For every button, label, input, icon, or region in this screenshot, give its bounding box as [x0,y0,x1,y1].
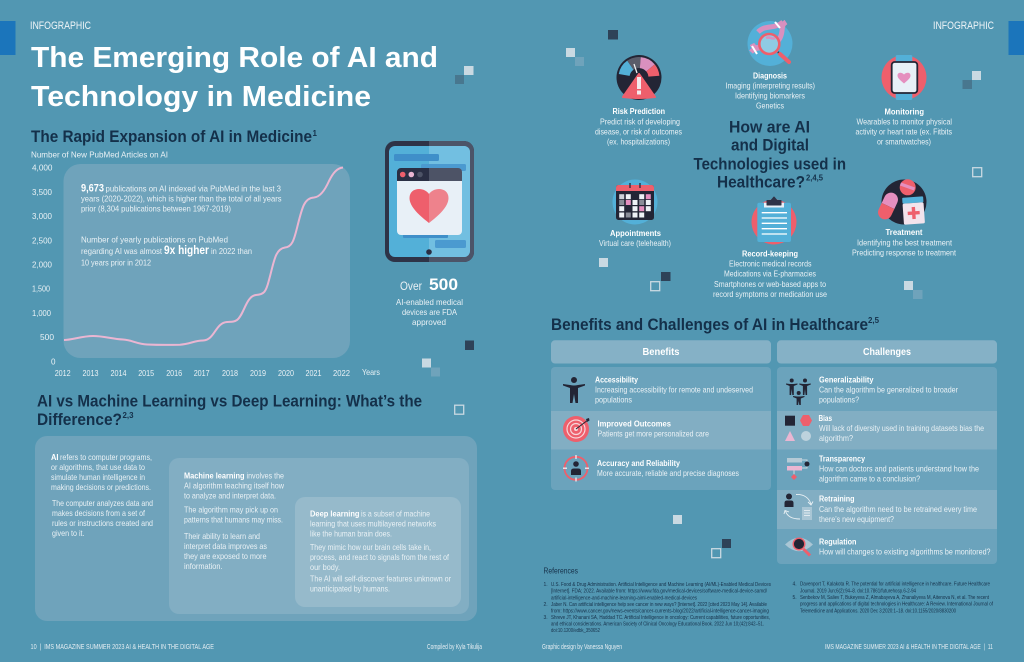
references: 5. [792,595,797,601]
text: record-keeping: record symptoms or medication use [713,289,827,299]
references: Journal. 2019 Jun;6(2):94–8. doi:10.7861/futurehosp.6-2-94 [800,588,916,594]
stat text: 9x higher: in 2022 than [211,246,252,256]
line chart: PubMed articles on AI: 2017 [194,368,210,378]
challenge: bias: Bias [818,413,832,423]
heading: how are AI and digital technologies used: Healthcare? [717,172,805,191]
icon: smartwatch [882,55,926,100]
line chart: PubMed articles on AI: 0 [51,356,56,366]
panel: AI: The computer analyzes data and [52,498,153,508]
text: treatment: Identifying the best treatment [857,238,953,248]
text: diagnosis: Imaging (interpreting results) [726,81,815,91]
references: 4. [792,582,797,588]
text: monitoring: Wearables to monitor physical [856,117,952,127]
stat text: 9,673 publications: prior (8,304 publications between 1967-2019) [81,204,231,214]
panel: AI: making decisions or predictions. [51,482,151,492]
benefit: accessibility: populations [595,394,632,404]
challenge: transparency: Transparency [819,454,865,464]
line chart: PubMed articles on AI: 2015 [138,368,154,378]
heading: how are AI and digital technologies used: 2,4,5 [806,172,823,182]
panel: AI: or algorithms, that use data to [51,462,145,472]
stat text: 9x higher: Number of yearly publications on PubMed [81,235,228,245]
text: risk prediction: Predict risk of developing [600,116,680,126]
panel: deep learning: is a subset of machine [361,509,430,519]
heading: AI vs ML vs DL: 2,3 [122,410,134,420]
challenge: transparency: algorithm came to a conclusion? [819,474,920,484]
references: Telemedicine and Applications. 2020 Dec 3;2020:1–18. doi:10.1155/2020/8830200 [800,608,956,614]
text: monitoring: or smartwatches) [877,137,931,147]
stat: over 500 devices: Over [400,279,422,293]
icon: clipboard [752,197,796,244]
heading: AI vs ML vs DL [37,392,422,429]
panel: machine learning: Their ability to learn and [184,531,260,541]
panel: benefits [551,340,771,490]
panel: AI [35,436,477,621]
stat text: 9x higher: 9x higher [164,245,209,257]
text: risk prediction [595,106,682,146]
challenge: bias: Will lack of diversity used in training datasets bias the [819,423,984,433]
left footer: 10 | IMS MAGAZINE SUMMER 2023 AI & HEALTH IN THE DIGITAL AGE [30,642,214,651]
left footer [30,642,483,651]
panel: machine learning: to analyze and interpret data. [184,491,276,501]
panel: deep learning: unanticipated by humans. [310,584,390,594]
text: monitoring [856,106,952,147]
text: treatment: Predicting response to treatment [852,248,957,258]
panel: deep learning: The AI will self-discover features unknown or [310,574,451,584]
references: U.S. Food & Drug Administration. Artificial Intelligence and Machine Learning (AI/ML)-Enabled Medical Devices [551,582,771,588]
text: risk prediction: disease, or risk of outcomes [595,126,682,136]
panel: machine learning: interpret data improves as [184,541,267,551]
heading: benefits and challenges: 2,5 [868,315,879,325]
stat text: 9x higher: regarding AI was almost [81,246,163,256]
stat: over 500 devices: 500 [429,275,458,294]
heading: how are AI and digital technologies used: Technologies used in [694,154,846,173]
text: diagnosis: Genetics [756,101,784,111]
references [544,566,994,634]
right page label: INFOGRAPHIC [933,20,994,32]
references: [Internet]. FDA; 2022. Available from: https://www.fda.gov/medical-devices/software-medical-device-samd/ [551,589,768,595]
benefits header: Benefits [642,346,680,358]
line chart: PubMed articles on AI: 2018 [222,368,238,378]
references: doi:10.1200/edbk_350652 [551,628,600,634]
main title [31,42,438,113]
panel: machine learning: involves the [246,471,284,481]
panel: machine learning: they are exposed to more [184,551,267,561]
line chart: PubMed articles on AI: 2014 [110,368,127,378]
text: treatment: Treatment [886,227,923,237]
stat: over 500 devices: devices are FDA [402,307,457,317]
heading: benefits and challenges: Benefits and Challenges of AI in Healthcare [551,315,868,334]
panel: AI: AI [51,452,58,462]
main title: Technology in Medicine [31,81,371,113]
panel: machine learning: Machine learning [184,471,244,481]
line chart: PubMed articles on AI: 4,000 [32,162,53,172]
challenge: transparency: How can doctors and patients understand how the [819,464,979,474]
panel: machine learning: AI algorithm teaching itself how [184,481,285,491]
line chart: PubMed articles on AI: 2,500 [32,235,52,245]
panel: deep learning: They mimic how our brain cells take in, [310,542,431,552]
text: treatment [852,227,957,258]
text: appointments [599,228,671,248]
stat: over 500 devices: AI-enabled medical [396,297,463,307]
panel: AI: given to it. [52,528,84,538]
panel: deep learning: like the human brain does. [310,529,392,539]
text: record-keeping: Electronic medical records [729,259,812,269]
references: 1. [544,582,548,588]
challenge: regulation: Regulation [819,536,856,546]
text: record-keeping: Smartphones or web-based apps to [714,279,826,289]
stat text: 9,673 publications: publications on AI indexed via PubMed in the last 3 [106,184,281,194]
benefit: accessibility [563,374,753,404]
challenge: generalizability: Generalizability [819,374,874,384]
heading: AI vs ML vs DL: Difference? [37,410,122,429]
line chart: PubMed articles on AI: 3,500 [32,187,52,197]
heading: how are AI and digital technologies used: and Digital [731,136,809,155]
line chart: PubMed articles on AI: 1,500 [32,283,50,293]
heading: how are AI and digital technologies used [694,118,846,191]
panel: AI: refers to computer programs, [60,452,152,462]
heading: AI vs ML vs DL: AI vs Machine Learning vs Deep Learning: What’s the [37,392,422,411]
benefit: accuracy and reliability [563,455,739,482]
panel: deep learning: learning that uses multilayered networks [310,519,436,529]
heading: rapid expansion: 1 [312,129,318,138]
references: Senbekov M, Saliev T, Bukeyeva Z, Almabayeva A, Zhanaliyeva M, Aitenova N, et al. The recent [800,595,990,601]
line chart: PubMed articles on AI: 2013 [82,368,99,378]
text: record-keeping: Record-keeping [742,249,798,259]
text: appointments: Appointments [610,228,661,238]
line chart: PubMed articles on AI: 2022 [333,368,350,378]
line chart: PubMed articles on AI: 2021 [306,368,322,378]
panel: machine learning: The algorithm may pick up on [184,505,278,515]
right footer [542,642,993,651]
challenge: retraining [784,494,977,524]
icon: risk gauge [616,55,662,100]
challenge: regulation: How will changes to existing algorithms be monitored? [819,546,991,556]
panel: deep learning: process, and react to signals from the rest of [310,552,450,562]
icon: pills and bottle [876,179,926,225]
text: appointments: Virtual care (telehealth) [599,238,671,248]
main title: The Emerging Role of AI and [31,42,438,74]
benefit: accessibility: Increasing accessibility for remote and undeserved [595,384,753,394]
benefit: accessibility: Accessibility [595,374,638,384]
text: record-keeping: Medications via E-pharmacies [724,269,816,279]
references: 3. [544,615,548,621]
benefits header [551,340,771,364]
line chart: PubMed articles on AI: 1,000 [32,308,51,318]
references: Davenport T, Kalakota R. The potential for artificial intelligence in healthcare. Future Healthcare [800,582,990,588]
left footer: Compiled by Kyla Tikulija [427,642,483,651]
references: Shreve JT, Khanani SA, Haddad TC. Artificial Intelligence in oncology: Current capabilities, future opportunities, [551,615,770,621]
challenge: generalizability: populations? [819,394,859,404]
text: monitoring: Monitoring [884,106,924,116]
panel: AI: simulate human intelligence in [51,472,145,482]
references: progress and applications of digital technologies in Healthcare: A Review. International Journal of [800,602,994,608]
challenge: regulation [785,536,991,556]
text: record-keeping [713,249,827,299]
challenge: retraining: there’s new equipment? [819,514,894,524]
text: diagnosis [726,71,815,111]
references: artificial-intelligence-and-machine-learning-aiml-enabled-medical-devices [551,595,697,601]
line chart: PubMed articles on AI [31,150,380,378]
text: risk prediction: Risk Prediction [612,106,665,116]
benefit: improved outcomes: Patients get more personalized care [598,429,709,439]
stat: over 500 devices [396,275,463,327]
text: monitoring: activity or heart rate (ex. Fitbits [856,127,952,137]
stat text: 9x higher: 10 years prior in 2012 [81,258,151,268]
stat text: 9,673 publications: years (2020-2022), which is higher than the total of all years [81,194,282,204]
challenge: retraining: Retraining [819,494,854,504]
line chart: PubMed articles on AI: 2012 [55,368,71,378]
challenges header [777,340,997,364]
line chart: PubMed articles on AI: 500 [40,332,54,342]
heading: how are AI and digital technologies used: How are AI [729,118,810,137]
challenge: retraining: Can the algorithm need to be retrained every time [819,504,977,514]
right page tab [1008,21,1024,55]
references: 2. [544,602,548,608]
icon: calendar [612,180,658,224]
line chart: PubMed articles on AI: Years [362,367,380,377]
challenge: bias [785,413,984,443]
benefit: improved outcomes [563,416,709,442]
panel: machine learning [169,458,469,614]
panel: deep learning: Deep learning [310,509,360,519]
benefit: accuracy and reliability: Accuracy and Reliability [597,458,680,468]
references: from: https://www.cancer.gov/news-events/cancer-currents-blog/2022/artificial-intelligence-cancer-imaging [551,608,769,614]
challenges header: Challenges [863,346,911,358]
benefit: accuracy and reliability: More accurate, reliable and precise diagnoses [597,468,739,478]
icon: DNA magnifier [748,21,792,66]
stat text: 9,673 publications: 9,673 [81,183,104,195]
line chart: PubMed articles on AI: 2019 [250,368,266,378]
panel: machine learning: information. [184,561,222,571]
line chart: PubMed articles on AI: 3,000 [32,211,52,221]
panel: deep learning [295,497,461,607]
text: diagnosis: Diagnosis [753,71,787,81]
panel: challenges [777,340,997,564]
references: Jaber N. Can artificial intelligence help see cancer in new ways? [Internet]. 2022 [cited 2023 May 14]. Available [551,602,767,608]
line chart: PubMed articles on AI: Number of New PubMed Articles on AI [31,150,168,160]
left page tab [0,21,16,55]
panel: AI: makes decisions from a set of [52,508,146,518]
panel: deep learning: our body. [310,562,340,572]
right footer: Graphic design by Vanessa Nguyen [542,642,622,651]
line chart: PubMed articles on AI: 2016 [166,368,182,378]
line chart: PubMed articles on AI: 2020 [278,368,294,378]
challenge: bias: algorithm? [819,433,853,443]
heading: rapid expansion: The Rapid Expansion of AI in Medicine [31,127,312,146]
icon: tablet with heart [385,141,474,262]
text: risk prediction: (ex. hospitalizations) [607,136,670,146]
panel: machine learning: patterns that humans may miss. [184,515,283,525]
references: References [544,566,578,575]
line chart: PubMed articles on AI: 2,000 [32,259,52,269]
benefit: improved outcomes: Improved Outcomes [598,419,671,429]
panel: AI: rules or instructions created and [52,518,153,528]
challenge: generalizability: Can the algorithm be generalized to broader [819,384,958,394]
stat: over 500 devices: approved [412,317,446,327]
stat text: 9,673 publications [81,183,282,214]
challenge: transparency [787,454,979,484]
challenge: generalizability [786,374,958,405]
references: and ethical considerations. American Society of Clinical Oncology Educational Book. 2022 Jun 10;(42):842–51. [551,622,764,628]
left page label: INFOGRAPHIC [30,20,91,32]
text: diagnosis: Identifying biomarkers [735,91,805,101]
stat text: 9x higher [81,235,252,268]
